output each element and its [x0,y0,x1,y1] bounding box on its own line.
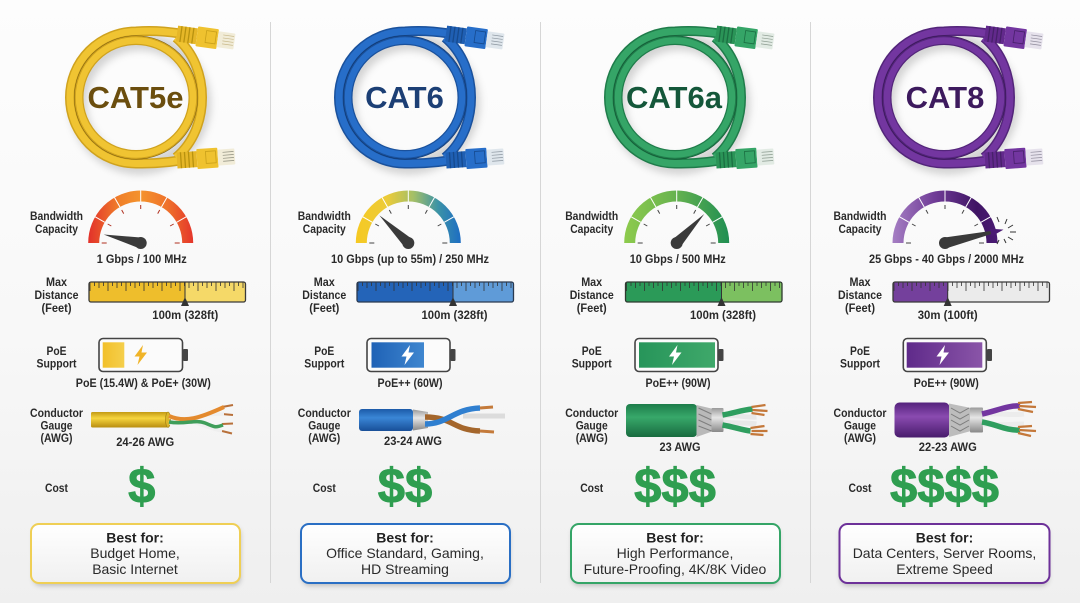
cable: blue CAT6 patch cord [339,24,505,170]
metric: PoE battery: Support [840,358,880,370]
callout: best for [301,524,510,586]
metric: max distance ruler: 100m (328ft) [422,310,488,322]
metric: conductor gauge cable [30,405,233,449]
metric: max distance ruler: 100m (328ft) [690,310,756,322]
metric: bandwidth capacity: Capacity [303,224,346,236]
metric: PoE battery: PoE [46,346,67,358]
metric: bandwidth capacity: 25 Gbps - 40 Gbps / 2000 MHz [869,254,1024,266]
callout: best for: Extreme Speed [896,561,993,577]
callout: best for [31,524,241,586]
metric: bandwidth capacity: Bandwidth [298,211,351,223]
panel: CAT6a [565,24,782,586]
metric: conductor gauge cable: 24-26 AWG [116,437,174,449]
metric: max distance ruler: (Feet) [577,303,607,315]
metric: conductor gauge cable: (AWG) [576,433,608,445]
metric: conductor gauge cable: 23-24 AWG [384,436,442,448]
cable: yellow CAT5e patch cord [70,24,236,170]
metric: bandwidth capacity: Capacity [35,224,79,236]
metric: max distance ruler: 100m (328ft) [152,310,218,322]
metric: conductor gauge cable [834,402,1036,454]
panel: CAT8 [834,24,1050,586]
metric: conductor gauge cable: Gauge [308,420,340,432]
metric: cost: $ [128,460,155,514]
metric: PoE battery: PoE++ (60W) [378,378,443,390]
metric: PoE battery: PoE [850,346,870,358]
metric: max distance ruler: Max [850,277,871,289]
metric: max distance ruler [34,277,246,322]
metric: conductor gauge cable: Conductor [834,408,887,420]
heading: CAT6a: CAT6a [626,80,723,115]
callout: best for: High Performance, [617,545,733,561]
metric: PoE battery [36,338,211,390]
metric: conductor gauge cable: (AWG) [40,433,73,445]
metric: cost: $$$$ [890,460,999,514]
metric: cost: Cost [313,483,336,495]
metric: bandwidth capacity: Bandwidth [30,211,83,223]
metric: max distance ruler [302,277,514,322]
metric: max distance ruler: 30m (100ft) [918,310,978,322]
metric: PoE battery: Support [572,358,612,370]
metric: conductor gauge cable: (AWG) [308,433,340,445]
metric: bandwidth capacity: Capacity [838,224,882,236]
metric: max distance ruler: (Feet) [42,303,72,315]
cable: green CAT6a patch cord [609,24,775,170]
metric: bandwidth capacity: Capacity [570,224,614,236]
callout: best for: Future-Proofing, 4K/8K Video [584,561,767,577]
callout: best for: Best for: [916,530,973,546]
heading: CAT6: CAT6 [365,80,444,115]
metric: bandwidth capacity: 10 Gbps (up to 55m) / 250 MHz [331,254,489,266]
metric: conductor gauge cable: (AWG) [844,433,876,445]
cable: purple CAT8 patch cord [878,24,1044,170]
metric: max distance ruler: Distance [838,290,882,302]
metric: PoE battery [304,338,456,390]
panel: CAT5e [30,24,246,586]
metric: max distance ruler: Max [581,277,603,289]
metric: bandwidth capacity [30,190,188,266]
callout: best for: Data Centers, Server Rooms, [853,545,1036,561]
metric: PoE battery [572,338,724,390]
metric: max distance ruler: (Feet) [845,303,875,315]
metric: PoE battery: Support [36,358,77,370]
metric: conductor gauge cable: Conductor [298,408,351,420]
metric: cost: Cost [848,483,872,495]
metric: conductor gauge cable: Gauge [40,420,72,432]
callout: best for: HD Streaming [361,561,449,577]
metric: cost [45,460,155,514]
metric: PoE battery: PoE [582,346,602,358]
callout: best for [840,524,1050,586]
metric: max distance ruler: (Feet) [309,303,339,315]
metric: conductor gauge cable: Gauge [576,420,608,432]
callout: best for [571,524,780,586]
metric: cost: $$ [378,460,432,514]
callout: best for: Best for: [376,530,434,546]
metric: PoE battery: PoE++ (90W) [646,378,711,390]
metric: bandwidth capacity [298,190,489,266]
metric: cost: Cost [580,483,603,495]
metric: conductor gauge cable: Gauge [844,420,876,432]
callout: best for: Best for: [106,530,164,546]
metric: cost: $$$ [634,460,716,514]
metric: max distance ruler: Distance [570,290,614,302]
panel: CAT6 [298,24,514,586]
metric: PoE battery: PoE [314,346,335,358]
metric: conductor gauge cable [298,407,505,448]
metric: cost [313,460,432,514]
metric: bandwidth capacity: 10 Gbps / 500 MHz [630,254,726,266]
metric: PoE battery: Support [304,358,344,370]
callout: best for: Basic Internet [92,561,178,577]
metric: max distance ruler: Distance [302,290,346,302]
metric: PoE battery: PoE++ (90W) [914,378,979,390]
metric: max distance ruler: Distance [34,290,78,302]
metric: PoE battery [840,338,992,390]
metric: conductor gauge cable [565,404,768,454]
metric: bandwidth capacity [565,190,726,266]
metric: max distance ruler: Max [314,277,335,289]
heading: CAT5e: CAT5e [88,80,183,115]
metric: conductor gauge cable: Conductor [565,408,619,420]
metric: conductor gauge cable: 22-23 AWG [919,442,977,454]
metric: cost [580,460,716,514]
metric: max distance ruler [838,277,1050,322]
metric: bandwidth capacity: Bandwidth [565,211,618,223]
metric: max distance ruler [570,277,782,322]
metric: bandwidth capacity: 1 Gbps / 100 MHz [97,254,187,266]
callout: best for: Budget Home, [90,545,180,561]
metric: PoE battery: PoE (15.4W) & PoE+ (30W) [76,378,211,390]
metric: bandwidth capacity: Bandwidth [834,211,886,223]
metric: conductor gauge cable: 23 AWG [660,442,701,454]
metric: max distance ruler: Max [46,277,68,289]
callout: best for: Office Standard, Gaming, [326,545,484,561]
metric: conductor gauge cable: Conductor [30,408,83,420]
heading: CAT8: CAT8 [906,80,984,115]
callout: best for: Best for: [646,530,704,546]
metric: bandwidth capacity [834,190,1024,266]
metric: cost: Cost [45,483,68,495]
